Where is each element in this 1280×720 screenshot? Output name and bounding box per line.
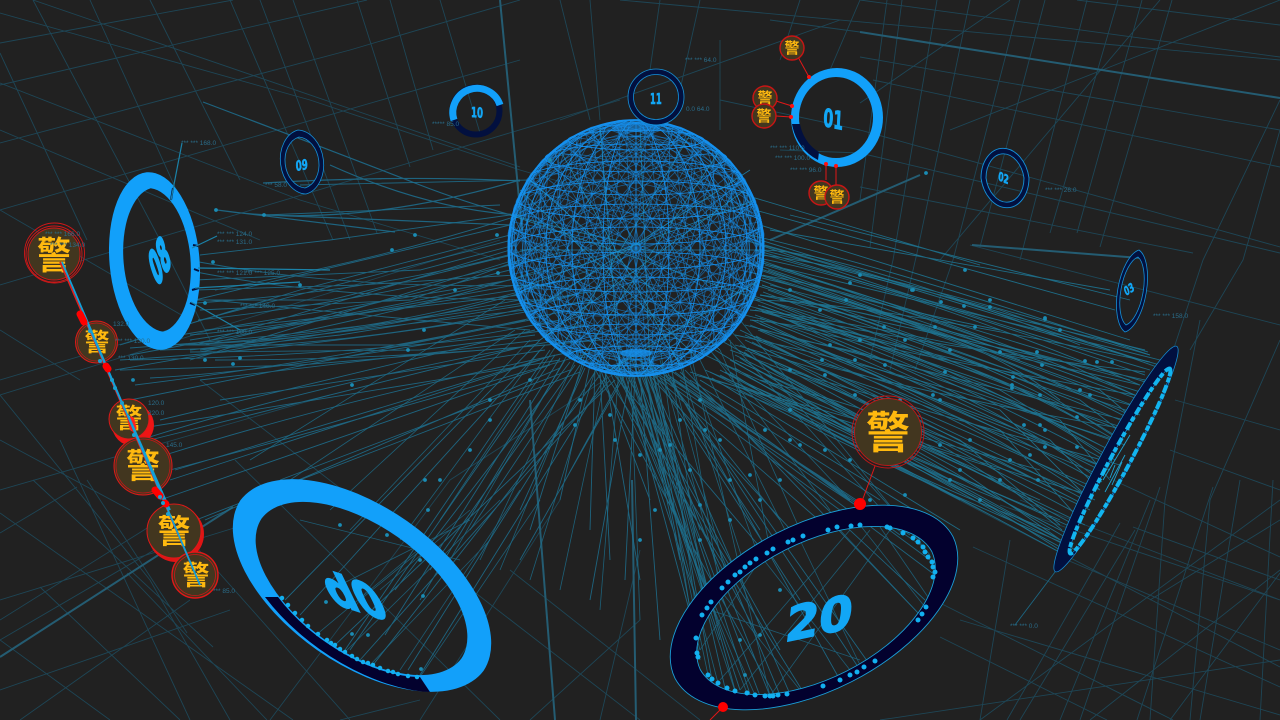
- ring 08: [109, 140, 330, 350]
- ring 08: *** *** 131.0: [217, 239, 252, 246]
- connection lines: right bundle curves: [705, 235, 1150, 548]
- ring 10: [432, 88, 500, 134]
- alert badge with overlap: 220.0: [148, 410, 165, 417]
- connection lines: lower fan extra: [250, 300, 930, 695]
- ring 20: 20: [783, 585, 856, 654]
- small alert badges around ring 01: 警: [784, 37, 800, 58]
- data labels: [245, 270, 1038, 630]
- alert badge: 警: [158, 505, 190, 553]
- alert badge: 警: [37, 226, 71, 281]
- ring 10: 10: [471, 104, 483, 121]
- ring 08: *** *** 140.0: [240, 303, 275, 310]
- data labels: *** *** 0.0: [1010, 623, 1038, 630]
- alert badge: *** 85.0: [213, 588, 235, 595]
- ring 08: *** *** 100.0: [217, 329, 252, 336]
- alert badge: *** *** 134.0: [50, 242, 85, 249]
- small alert badges around ring 01: 警: [813, 182, 829, 203]
- alert badge: *** 130.0: [118, 355, 144, 362]
- ring 03: 03: [1123, 281, 1136, 299]
- connection lines: lower fan: [285, 340, 960, 696]
- data labels: *** *** 125.0: [245, 270, 280, 277]
- ring 01: *** *** 96.0: [790, 167, 822, 174]
- ring 01: *** *** 110.0: [770, 145, 805, 152]
- ring 20: [670, 505, 958, 710]
- ring 08: 08: [144, 226, 175, 297]
- large alert badge on ring 20: [852, 396, 924, 510]
- small alert badges around ring 01: 警: [756, 105, 772, 126]
- ring 03: *** *** 158.0: [1153, 313, 1188, 320]
- large alert badge on ring 20: 警: [866, 397, 910, 461]
- alert badge: 132.0: [113, 321, 130, 328]
- ring 09: *** 58.0: [265, 182, 287, 189]
- alert badge: 警: [126, 439, 160, 488]
- alert badge: [172, 552, 235, 598]
- small alert badges around ring 01: [752, 36, 849, 209]
- small alert badges around ring 01: 警: [829, 186, 845, 207]
- alert badge with overlap: 120.0: [148, 400, 165, 407]
- alert badge: 145.0: [166, 442, 183, 449]
- ring 02: 02: [998, 169, 1009, 188]
- globe wireframe: [456, 68, 816, 428]
- alert badge: *** *** 166.0: [45, 231, 80, 238]
- ring 02: *** *** 26.0: [1045, 187, 1077, 194]
- connection lines: inside ring d0 and ring 20: [300, 490, 1055, 696]
- ring 09: 09: [295, 156, 308, 175]
- ring 11: [628, 57, 717, 125]
- scatter nodes: [133, 160, 1112, 675]
- alert badge: [76, 321, 150, 363]
- alert marker at bottom of ring 20: [710, 702, 728, 720]
- alert badge: [147, 504, 204, 562]
- ring 03: [1116, 250, 1188, 332]
- alert badge: 警: [182, 554, 210, 593]
- ring 08: *** *** 124.0: [217, 231, 252, 238]
- ring 08: *** *** 168.0: [181, 140, 216, 147]
- alert badge: 警: [84, 323, 110, 359]
- ring 09: [265, 130, 324, 194]
- ring 01: [770, 68, 883, 174]
- alert badge with overlap: 警: [116, 397, 142, 436]
- long upper curves: [203, 102, 640, 245]
- alert badge: [114, 437, 183, 495]
- alert column leader line: [60, 262, 200, 585]
- small alert badges around ring 01: 警: [757, 87, 773, 108]
- connection lines: right bundle: [690, 195, 1165, 555]
- ring 11: *** *** 64.0: [685, 57, 717, 64]
- ring 01: *** *** 100.0: [775, 155, 810, 162]
- alert badge: [24, 223, 85, 283]
- ring d0 (mirrored): [233, 479, 491, 692]
- alert badge with overlap: [109, 397, 165, 446]
- ring 01: 01: [823, 103, 844, 136]
- ring 04, edge-on: [1054, 346, 1178, 572]
- ring 10: ***** 85.0: [432, 121, 459, 128]
- alert badge: *** *** 130.0: [115, 338, 150, 345]
- ring 11: 0.0 64.0: [686, 106, 710, 113]
- ring d0 (mirrored): d0: [311, 558, 397, 634]
- ring 11: 11: [650, 90, 662, 108]
- ring 08: *** *** 121.0: [217, 270, 252, 277]
- connection lines: left bundle: [115, 180, 600, 530]
- ring 02: [981, 148, 1077, 208]
